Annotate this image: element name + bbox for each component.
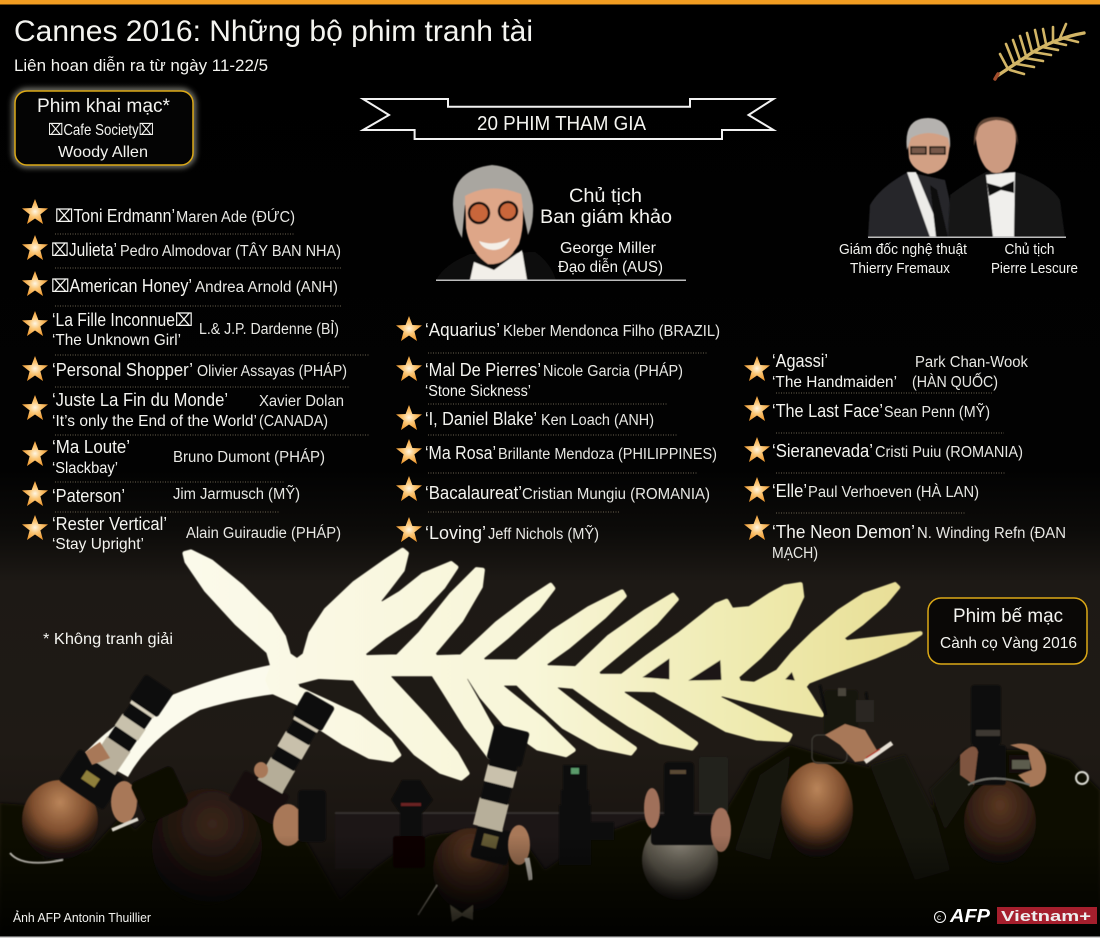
film: The Neon Demon (744, 515, 1066, 562)
photo credit: Ảnh AFP Antonin Thuillier (13, 910, 152, 925)
film: I, Daniel Blake (396, 405, 654, 430)
film: The Last Face: ‘The Last Face’ (772, 401, 883, 421)
callout: closing film: Cành cọ Vàng 2016 (940, 635, 1077, 652)
film: La Fille Inconnue (22, 310, 339, 349)
film: I, Daniel Blake: Ken Loach (ANH) (541, 412, 654, 429)
camera 2 hand (254, 762, 326, 846)
callout: opening film: Woody Allen (58, 144, 148, 161)
callout: closing film: Phim bế mạc (953, 606, 1063, 627)
top orange bar (0, 0, 1100, 4)
film: Aquarius (396, 316, 720, 341)
film: American Honey: Andrea Arnold (ANH) (195, 279, 338, 296)
film: Mal De Pierres: Nicole Garcia (PHÁP) (543, 363, 683, 380)
logo: AFP and Vietnam+ (934, 906, 1097, 926)
festival directors portraits and captions: Giám đốc nghệ thuật (839, 241, 968, 258)
film: Mal De Pierres (396, 356, 683, 400)
film: Julieta (22, 235, 341, 260)
photo: golden palm on backdrop (85, 550, 920, 778)
film list: left column (22, 199, 369, 553)
film: Juste La Fin du Monde: Xavier Dolan (259, 393, 344, 410)
film: American Honey (22, 271, 338, 296)
film: Ma Rosa: ‘Ma Rosa’ (425, 443, 496, 463)
callout: opening film: Phim khai mạc* (37, 96, 171, 117)
jury president portrait and text: Đạo diễn (AUS) (558, 257, 663, 276)
film: Mal De Pierres: ‘Stone Sickness’ (425, 383, 531, 400)
film: La Fille Inconnue: ‘The Unknown Girl’ (52, 332, 181, 349)
film: Ma Rosa (396, 439, 717, 464)
film: The Neon Demon: ‘The Neon Demon’ (772, 522, 915, 542)
festival directors portraits and captions (839, 117, 1078, 277)
camera 3 (462, 724, 540, 866)
film: Rester Vertical: ‘Rester Vertical’ (52, 514, 167, 534)
film: Personal Shopper: Olivier Assayas (PHÁP) (197, 363, 347, 380)
film: Rester Vertical: Alain Guiraudie (PHÁP) (186, 525, 341, 542)
bottom shading (0, 835, 1100, 938)
festival directors portraits and captions: Chủ tịch (1004, 241, 1054, 258)
film: Agassi: Park Chan-Wook (915, 354, 1028, 371)
photo: photographers and cameras (0, 667, 1100, 938)
film: The Last Face (744, 396, 990, 421)
film: Bacalaureat (396, 476, 710, 503)
film: Julieta: ⌧Julieta’ (51, 240, 117, 260)
film: Agassi: ‘The Handmaiden’ (772, 374, 897, 391)
film: Sieranevada: Cristi Puiu (ROMANIA) (875, 444, 1023, 461)
film: Rester Vertical: ‘Stay Upright’ (52, 536, 144, 553)
film: Paterson (22, 481, 300, 506)
film: Ma Loute (22, 437, 325, 477)
bodies of photographers (0, 745, 1100, 938)
film list: right column (744, 351, 1066, 562)
film: Juste La Fin du Monde: ‘It’s only the End of the World’ (52, 413, 257, 430)
film: Bacalaureat: Cristian Mungiu (ROMANIA) (522, 486, 710, 503)
film: Toni Erdmann: Maren Ade (ĐỨC) (176, 209, 295, 226)
portrait: Pierre Lescure (948, 117, 1065, 237)
callout: opening film (15, 91, 193, 165)
person: bald head left (10, 780, 98, 863)
film: Juste La Fin du Monde: ‘Juste La Fin du Monde’ (52, 390, 228, 410)
film: La Fille Inconnue: L.& J.P. Dardenne (BỈ) (199, 321, 339, 338)
camera 4 short lens (391, 780, 433, 868)
film: Paterson: ‘Paterson’ (52, 486, 125, 506)
icon: golden palm small (995, 24, 1084, 79)
film: Paterson: Jim Jarmusch (MỸ) (173, 486, 300, 503)
film: Mal De Pierres: ‘Mal De Pierres’ (425, 360, 541, 380)
film: Julieta: Pedro Almodovar (TÂY BAN NHA) (120, 243, 341, 260)
film: Elle: Paul Verhoeven (HÀ LAN) (808, 484, 979, 501)
film: Loving (396, 517, 599, 543)
callout: closing film (928, 598, 1087, 664)
jury president portrait and text (436, 165, 686, 281)
jury president portrait and text: Ban giám khảo (540, 207, 672, 228)
film: Elle: ‘Elle’ (772, 481, 807, 501)
camera 7 (812, 685, 892, 763)
film: Loving: Jeff Nichols (MỸ) (488, 526, 599, 543)
film: La Fille Inconnue: ‘La Fille Inconnue⌧ (52, 310, 193, 330)
person: short brown hair right (964, 780, 1036, 864)
backdrop table band (335, 812, 815, 869)
film: The Last Face: Sean Penn (MỸ) (884, 404, 990, 421)
camera 2 (228, 684, 340, 825)
camera 8 (960, 685, 1088, 787)
film list: middle column (396, 316, 720, 543)
person: dark hair (152, 789, 262, 905)
portrait: Thierry Fremaux (868, 118, 958, 237)
camera 3 hand (508, 825, 531, 880)
footnote: * Không tranh giải (43, 631, 173, 648)
logo: AFP and Vietnam+: AFP (949, 906, 991, 926)
camera 5 flash (559, 765, 614, 865)
film: Agassi (744, 351, 1028, 391)
logo: AFP and Vietnam+: Vietnam+ (1001, 908, 1091, 925)
person: brown hair with ribbon (418, 828, 509, 922)
film: Ma Rosa: Brillante Mendoza (PHILIPPINES) (498, 446, 717, 463)
film: American Honey: ⌧American Honey’ (51, 276, 192, 296)
logo: AFP and Vietnam+: c (937, 913, 941, 922)
film: Bacalaureat: ‘Bacalaureat’ (425, 483, 522, 503)
festival directors portraits and captions: Thierry Fremaux (850, 260, 950, 277)
film: Ma Loute: Bruno Dumont (PHÁP) (173, 449, 325, 466)
subtitle: Liên hoan diễn ra từ ngày 11-22/5 (14, 56, 268, 75)
film: Loving: ‘Loving’ (425, 523, 486, 543)
camera 1 (58, 667, 180, 810)
film: Elle (744, 477, 979, 502)
film: Personal Shopper: ‘Personal Shopper’ (52, 360, 193, 380)
film: Agassi: ‘Agassi’ (772, 351, 828, 371)
bottom edge (0, 936, 1100, 938)
film: Aquarius: ‘Aquarius’ (425, 320, 500, 340)
film: Ma Loute: ‘Ma Loute’ (52, 437, 130, 457)
film: Personal Shopper (22, 356, 347, 381)
film: Rester Vertical (22, 514, 341, 553)
film: Sieranevada (744, 437, 1023, 462)
person: bald head centre right (781, 762, 853, 858)
callout: opening film: ⌧Cafe Society⌧ (48, 122, 154, 139)
festival directors portraits and captions: Pierre Lescure (991, 260, 1078, 277)
film: Ma Loute: ‘Slackbay’ (52, 460, 118, 477)
film: Toni Erdmann: ⌧Toni Erdmann’ (55, 206, 175, 226)
film: I, Daniel Blake: ‘I, Daniel Blake’ (425, 409, 537, 429)
ribbon banner (363, 99, 774, 139)
film: Juste La Fin du Monde (22, 390, 344, 430)
portrait: George Miller (436, 165, 556, 280)
camera 6 with flash (644, 757, 731, 852)
camera 1 hands and second body (85, 742, 190, 830)
film: Juste La Fin du Monde: (CANADA) (259, 413, 328, 430)
film: Agassi: (HÀN QUỐC) (912, 373, 998, 391)
ribbon banner: 20 PHIM THAM GIA (477, 113, 647, 135)
person: grey hair (642, 820, 718, 900)
jury president portrait and text: George Miller (560, 240, 657, 257)
film: The Neon Demon: N. Winding Refn (ĐAN (917, 525, 1066, 542)
film: Aquarius: Kleber Mendonca Filho (BRAZIL) (503, 323, 720, 340)
title: Cannes 2016: Những bộ phim tranh tài (14, 15, 533, 48)
film: The Neon Demon: MẠCH) (772, 545, 818, 562)
film: Sieranevada: ‘Sieranevada’ (772, 441, 873, 461)
jury president portrait and text: Chủ tịch (569, 186, 642, 207)
film: Toni Erdmann (22, 199, 295, 226)
